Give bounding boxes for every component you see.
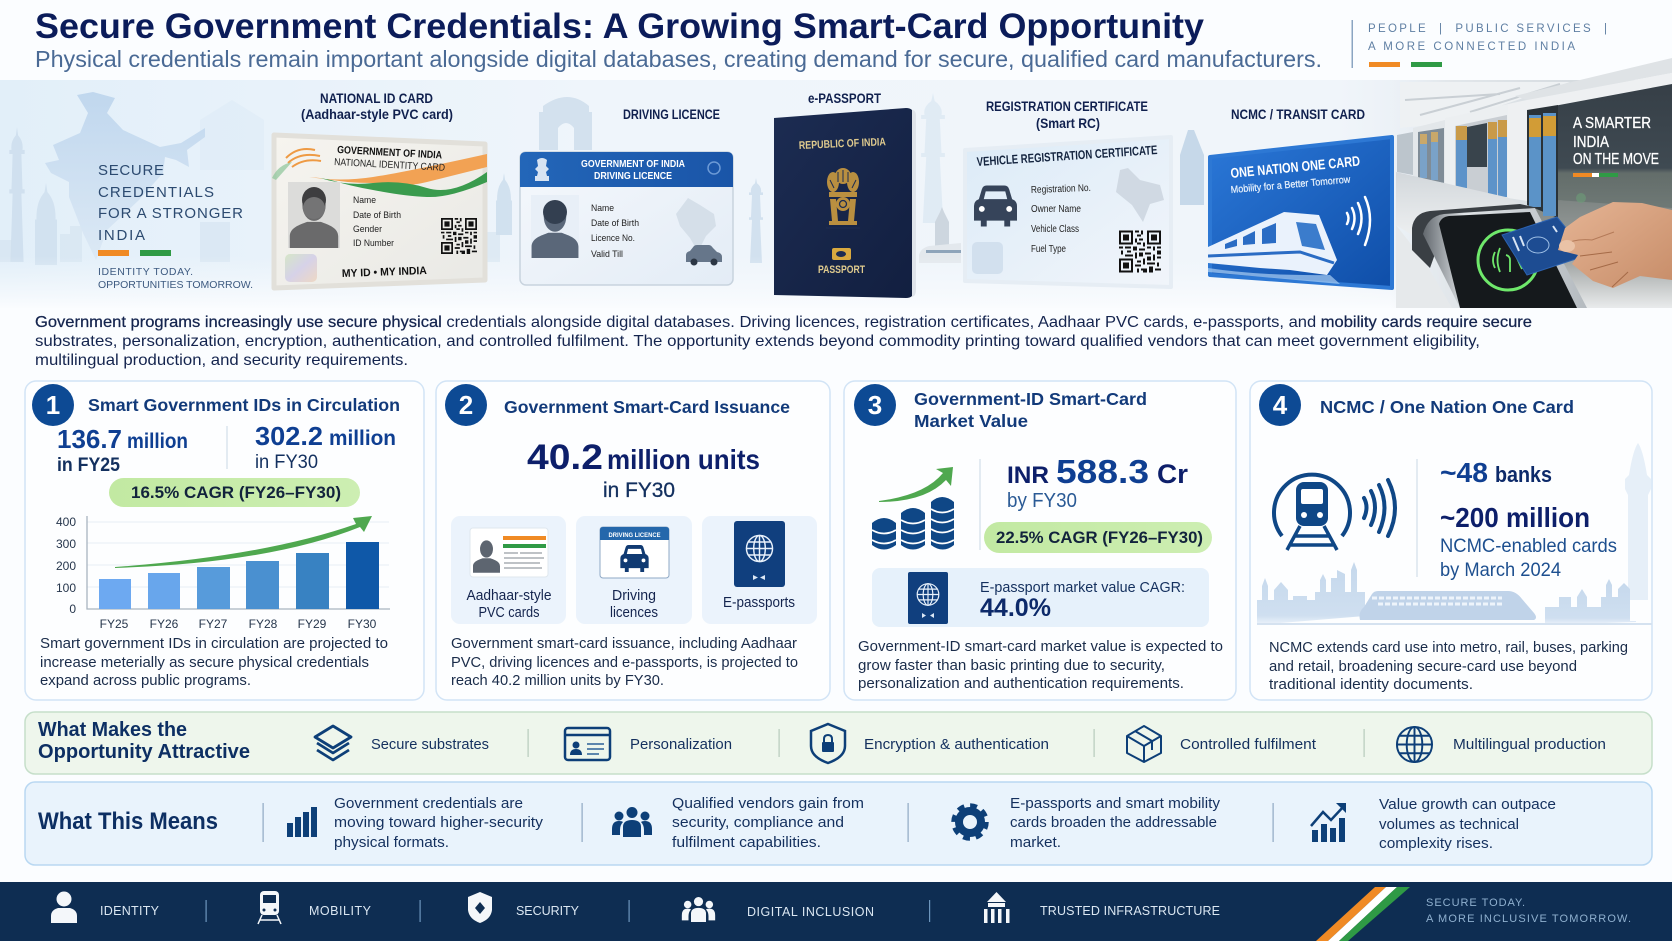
header: title: Secure Government Credentials: A Growing Smart-Card Opportunity xyxy=(35,7,1205,46)
item: qualified vendors xyxy=(612,795,864,851)
green ring xyxy=(1478,230,1538,290)
driving licence card: Name xyxy=(591,203,614,214)
e-passport: REPUBLIC OF INDIA xyxy=(799,136,886,152)
strip heading: What This Means xyxy=(38,808,218,835)
number badge 2: 2 xyxy=(459,390,473,420)
item: qualified vendors: fulfilment capabilities. xyxy=(672,834,821,851)
driving licence card: DRIVING LICENCE xyxy=(594,170,672,182)
card labels: NCMC / TRANSIT CARD xyxy=(1231,107,1365,122)
tagline: CREDENTIALS xyxy=(98,184,214,201)
tagline: FOR A STRONGER xyxy=(98,205,243,222)
intro paragraph: multilingual production, and security requirements. xyxy=(35,352,408,369)
national ID card: GOVERNMENT OF INDIA xyxy=(337,144,443,162)
number badge 3 xyxy=(854,384,896,426)
headline stat: in FY30 xyxy=(603,479,675,502)
number badge 3: 3 xyxy=(868,390,882,420)
tile: Aadhaar PVC: Aadhaar-style xyxy=(466,588,552,604)
registration certificate card: VEHICLE REGISTRATION CERTIFICATE xyxy=(976,143,1158,169)
national ID card: Name xyxy=(353,195,376,206)
footer: security: SECURITY xyxy=(516,904,580,918)
footer: mobility xyxy=(258,891,372,924)
bar chart: 100 xyxy=(56,581,76,595)
blue doors xyxy=(1527,105,1558,218)
item: multilingual production xyxy=(1397,727,1606,762)
panel 3 description: grow faster than basic printing due to security, xyxy=(858,657,1165,674)
India map and tagline: OPPORTUNITIES TOMORROW. xyxy=(98,279,253,291)
banks stat: ~48 xyxy=(1440,457,1488,488)
hand xyxy=(1558,202,1672,288)
far cars xyxy=(1397,132,1413,175)
e-passport: PASSPORT xyxy=(818,264,865,276)
cards stat: NCMC-enabled cards xyxy=(1440,535,1617,557)
footer: security xyxy=(468,892,580,923)
value stat: 588.3 xyxy=(1056,453,1149,490)
bar chart: FY27 xyxy=(199,617,228,631)
item: encryption and authentication: Encryption & authentication xyxy=(864,736,1049,753)
value stat: by FY30 xyxy=(1007,489,1077,512)
panel 3: market value xyxy=(844,381,1236,700)
bar chart: FY28 xyxy=(249,617,278,631)
strip heading: What Makes the xyxy=(38,718,187,741)
footer tagline: A MORE INCLUSIVE TOMORROW. xyxy=(1426,913,1631,925)
panel 2 description xyxy=(451,635,798,689)
header: right tagline xyxy=(1352,20,1607,68)
station caption xyxy=(1573,115,1659,168)
national ID card: Gender xyxy=(353,224,382,235)
card labels: e-PASSPORT xyxy=(808,91,882,106)
strip: what makes the opportunity attractive xyxy=(25,712,1652,774)
cards stat xyxy=(1440,502,1617,581)
item: broaden market: cards broaden the addressable xyxy=(1010,814,1217,831)
cards stat: ~200 million xyxy=(1440,502,1590,533)
panel 4 heading: NCMC / One Nation One Card xyxy=(1320,397,1574,417)
item: personalization: Personalization xyxy=(630,736,732,753)
bar chart: FY25 xyxy=(100,617,129,631)
card labels xyxy=(301,91,1365,131)
item: higher-security formats: physical formats. xyxy=(334,834,449,851)
panel 3 heading: Government-ID Smart-Card xyxy=(914,389,1147,409)
station scene xyxy=(1390,58,1672,308)
near train body xyxy=(1527,83,1672,208)
panel 3 heading xyxy=(914,389,1147,431)
driving licence card: Licence No. xyxy=(591,233,635,244)
item: qualified vendors: Qualified vendors gain from xyxy=(672,795,864,812)
number badge 4 xyxy=(1259,384,1301,426)
driving licence card: Valid Till xyxy=(591,249,623,260)
tile: driving licences: Driving xyxy=(612,588,656,604)
NCMC transit card xyxy=(1208,137,1392,288)
tile: driving licences: DRIVING LICENCE xyxy=(608,532,661,539)
panel 3 heading: Market Value xyxy=(914,411,1028,431)
item: controlled fulfilment xyxy=(1127,726,1317,762)
CAGR pill xyxy=(109,478,360,507)
tile: driving licences: licences xyxy=(610,605,658,621)
tagline: INDIA xyxy=(98,227,145,244)
station caption: INDIA xyxy=(1573,134,1609,151)
tagline: SECURE xyxy=(98,162,164,179)
driving licence card xyxy=(520,152,733,285)
panel 4 description: and retail, broadening secure-card use beyond xyxy=(1269,658,1577,675)
footer tagline xyxy=(1426,897,1631,925)
small monument and train beside passport xyxy=(919,207,961,263)
bar chart xyxy=(56,515,390,631)
bar chart: 400 xyxy=(56,515,76,529)
driving licence card: Date of Birth xyxy=(591,218,639,229)
bar chart: 300 xyxy=(56,537,76,551)
panel 1 description xyxy=(40,635,388,689)
item: value growth: Value growth can outpace xyxy=(1379,796,1556,813)
card labels: DRIVING LICENCE xyxy=(623,107,720,122)
number badge 1 xyxy=(32,384,74,426)
tile: Aadhaar PVC xyxy=(451,516,566,624)
item: broaden market: market. xyxy=(1010,834,1061,851)
footer bar xyxy=(0,882,1672,941)
number badge 2 xyxy=(445,384,487,426)
registration certificate card xyxy=(965,137,1171,287)
e-passport callout: E-passport market value CAGR: xyxy=(980,579,1185,596)
white pillar xyxy=(1508,100,1527,201)
faint skyline backdrop xyxy=(0,93,1405,265)
national ID card xyxy=(272,135,487,288)
panel 4 description: traditional identity documents. xyxy=(1269,676,1473,693)
item: higher-security formats: Government credentials are xyxy=(334,795,523,812)
NCMC transit card: ONE NATION ONE CARD xyxy=(1230,153,1361,181)
card labels: REGISTRATION CERTIFICATE xyxy=(986,99,1148,114)
panel 2 description: Government smart-card issuance, including Aadhaar xyxy=(451,635,797,652)
footer: identity xyxy=(51,892,160,923)
number badge 4: 4 xyxy=(1273,390,1288,420)
footer: digital inclusion: DIGITAL INCLUSION xyxy=(747,905,874,919)
registration certificate card: Vehicle Class xyxy=(1031,224,1079,235)
item: secure substrates: Secure substrates xyxy=(371,736,489,753)
FY25 stat: million xyxy=(127,430,188,453)
FY25 stat: in FY25 xyxy=(57,455,120,476)
FY25 stat xyxy=(57,424,188,476)
banks stat xyxy=(1440,457,1552,488)
e-passport callout xyxy=(872,568,1209,627)
number badge 1: 1 xyxy=(46,390,60,420)
item: broaden market: E-passports and smart mobility xyxy=(1010,795,1221,812)
platform xyxy=(1396,172,1535,240)
panel 4 description xyxy=(1269,639,1628,693)
station caption: A SMARTER xyxy=(1573,115,1651,132)
FY25 stat: 136.7 xyxy=(57,424,122,454)
panel 2: smart-card issuance xyxy=(436,381,830,700)
tile: Aadhaar PVC: PVC cards xyxy=(478,605,540,621)
panel 3 description: personalization and authentication requirements. xyxy=(858,675,1184,692)
intro paragraph xyxy=(35,314,1532,369)
intro paragraph: Government programs increasingly use secure physical credentials alongside digital databases. Driving licences, registration certificates, Aadhaar PVC cards, e-passports, and mobility cards require secure xyxy=(35,314,1532,331)
bar chart: FY26 xyxy=(150,617,179,631)
green rising arrow xyxy=(879,467,953,502)
FY30 stat: 302.2 xyxy=(255,421,323,451)
driving licence card: GOVERNMENT OF INDIA xyxy=(581,158,685,170)
ground below near train xyxy=(1527,198,1672,308)
panel 3 description: Government-ID smart-card market value is expected to xyxy=(858,638,1223,655)
card labels: (Smart RC) xyxy=(1036,116,1100,131)
value stat xyxy=(1007,453,1188,512)
FY30 stat: million xyxy=(329,427,396,450)
footer tagline: SECURE TODAY. xyxy=(1426,897,1525,909)
panel 2 description: reach 40.2 million units by FY30. xyxy=(451,672,664,689)
header: subtitle: Physical credentials remain important alongside digital databases, creating demand for secure, qualified card manufacturers. xyxy=(35,46,1322,72)
India map and tagline xyxy=(45,92,253,291)
panel 1 description: increase meterially as secure physical credentials xyxy=(40,654,369,671)
item: higher-security formats xyxy=(287,795,544,851)
panel 4: NCMC xyxy=(1250,381,1652,700)
panel 1: smart government IDs xyxy=(25,381,424,700)
growth arrow xyxy=(115,516,372,568)
item: value growth: volumes as technical xyxy=(1379,816,1519,833)
value stat: INR xyxy=(1007,462,1049,489)
registration certificate card: Registration No. xyxy=(1031,183,1091,196)
item: multilingual production: Multilingual production xyxy=(1453,736,1606,753)
hero band xyxy=(0,80,1672,308)
e-passport callout: 44.0% xyxy=(980,594,1051,622)
item: encryption and authentication xyxy=(811,724,1049,763)
CAGR pill xyxy=(984,522,1212,553)
strip heading: Opportunity Attractive xyxy=(38,740,250,763)
footer: trusted infrastructure xyxy=(984,892,1220,923)
faint skyline xyxy=(1257,443,1652,625)
headline stat: million units xyxy=(607,444,760,475)
tapped card xyxy=(1502,217,1588,275)
India map and tagline: IDENTITY TODAY. xyxy=(98,266,193,278)
item: value growth: complexity rises. xyxy=(1379,835,1493,852)
registration certificate card: Owner Name xyxy=(1031,204,1081,215)
ceiling xyxy=(1400,82,1570,128)
validator xyxy=(1412,204,1538,268)
tile: driving licences xyxy=(576,516,692,624)
FY30 stat xyxy=(255,421,396,473)
panel 1 description: Smart government IDs in circulation are projected to xyxy=(40,635,388,652)
header: right tagline: PEOPLE | PUBLIC SERVICES | xyxy=(1368,23,1607,35)
panel 4 description: NCMC extends card use into metro, rail, buses, parking xyxy=(1269,639,1628,656)
FY30 stat: in FY30 xyxy=(255,452,318,473)
national ID card: ID Number xyxy=(353,238,394,249)
item: personalization xyxy=(565,728,732,760)
train icon with contactless waves xyxy=(1274,475,1395,550)
bar chart: 200 xyxy=(56,559,76,573)
tile: e-passports xyxy=(702,516,817,624)
panel 2 description: PVC, driving licences and e-passports, is projected to xyxy=(451,654,798,671)
panel 2 heading: Government Smart-Card Issuance xyxy=(504,397,790,417)
bar chart: 0 xyxy=(69,602,76,616)
CAGR pill: 16.5% CAGR (FY26–FY30) xyxy=(131,483,341,502)
card labels: (Aadhaar-style PVC card) xyxy=(301,107,453,122)
item: broaden market xyxy=(954,795,1221,851)
coin stacks icon xyxy=(872,467,954,550)
item: value growth xyxy=(1311,796,1556,852)
value stat: Cr xyxy=(1157,459,1188,489)
item: qualified vendors: security, compliance and xyxy=(672,814,844,831)
bar chart: FY29 xyxy=(298,617,327,631)
footer: trusted infrastructure: TRUSTED INFRASTRUCTURE xyxy=(1040,904,1220,918)
map xyxy=(45,92,205,260)
panel 1 heading: Smart Government IDs in Circulation xyxy=(88,395,400,415)
header: right tagline: A MORE CONNECTED INDIA xyxy=(1368,41,1575,53)
strip heading xyxy=(38,718,250,763)
strip: what this means xyxy=(25,782,1652,865)
national ID card: NATIONAL IDENTITY CARD xyxy=(334,157,445,174)
panel 1 description: expand across public programs. xyxy=(40,672,251,689)
bar chart: FY30 xyxy=(348,617,377,631)
headline stat xyxy=(527,438,760,502)
footer: digital inclusion xyxy=(682,897,874,922)
card labels: NATIONAL ID CARD xyxy=(320,91,433,106)
headline stat: 40.2 xyxy=(527,438,603,477)
item: controlled fulfilment: Controlled fulfilment xyxy=(1180,736,1317,753)
tile: e-passports: E-passports xyxy=(723,595,795,611)
panel 3 description xyxy=(858,638,1223,692)
tagline xyxy=(98,162,243,244)
item: higher-security formats: moving toward higher-security xyxy=(334,814,544,831)
registration certificate card: Fuel Type xyxy=(1031,244,1066,255)
footer: mobility: MOBILITY xyxy=(309,904,372,918)
national ID card: MY ID • MY INDIA xyxy=(342,265,427,280)
cards stat: by March 2024 xyxy=(1440,559,1561,581)
banks stat: banks xyxy=(1495,462,1552,487)
national ID card: Date of Birth xyxy=(353,210,401,221)
footer: identity: IDENTITY xyxy=(100,904,160,918)
tricolour stripe xyxy=(1316,887,1410,941)
e-passport xyxy=(774,108,916,298)
CAGR pill: 22.5% CAGR (FY26–FY30) xyxy=(996,528,1203,547)
floor xyxy=(0,256,1400,308)
intro paragraph: substrates, personalization, encryption, authentication, and controlled fulfilment. The opportunity extends beyond commodity printing toward qualified vendors that can meet government eligibility, xyxy=(35,333,1480,350)
NCMC transit card: Mobility for a Better Tomorrow xyxy=(1230,175,1352,196)
item: secure substrates xyxy=(315,726,489,760)
middle car xyxy=(1445,104,1508,200)
